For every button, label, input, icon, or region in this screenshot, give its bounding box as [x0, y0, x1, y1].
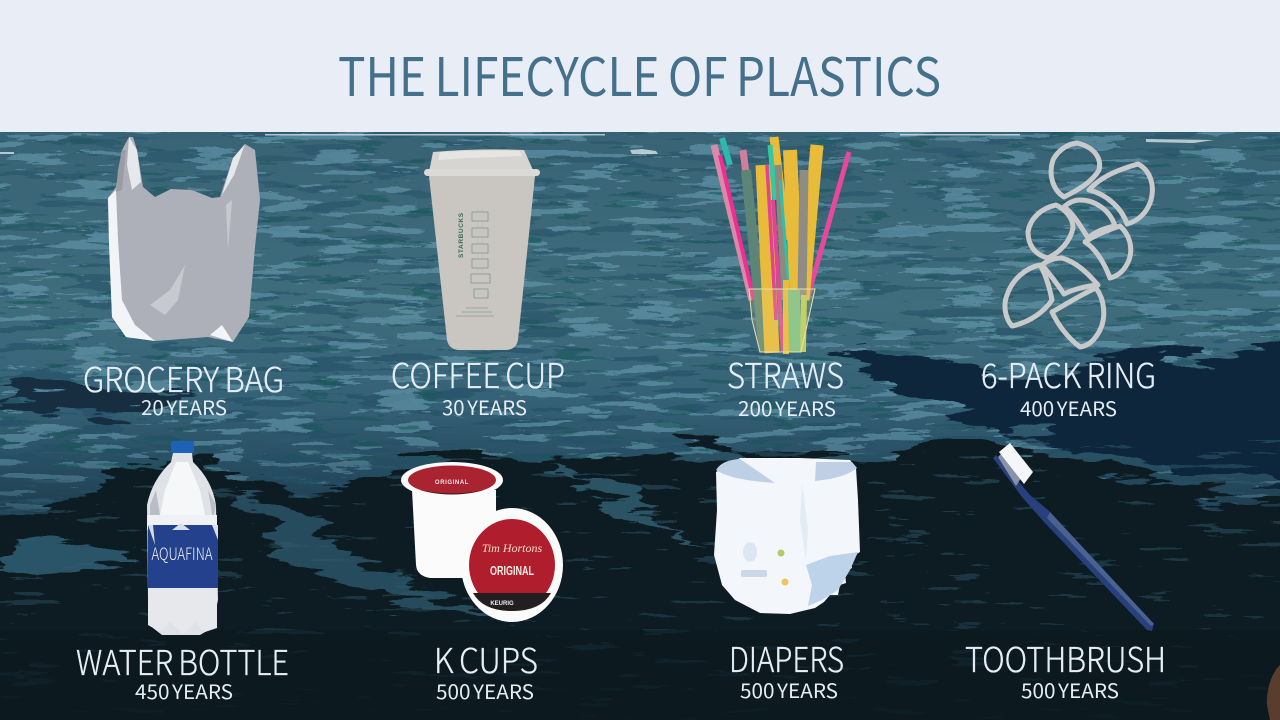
icon: k cup pods — [401, 462, 563, 622]
label: water bottle: WATER BOTTLE — [76, 636, 289, 685]
item: 6-pack ring — [981, 143, 1156, 422]
label: diapers: DIAPERS — [729, 633, 844, 682]
item: coffee cup — [391, 149, 565, 421]
label: 500 years: 500 YEARS — [740, 675, 838, 704]
title: THE LIFECYCLE OF PLASTICS — [338, 36, 941, 112]
label: 6-pack ring: 6-PACK RING — [981, 349, 1156, 398]
label: 30 years: 30 YEARS — [442, 392, 527, 421]
label: 500 years: 500 YEARS — [1021, 675, 1119, 704]
item: straws — [714, 137, 849, 422]
item: k cups — [401, 462, 563, 705]
icon: straws in glass — [714, 137, 849, 354]
icon: reusable cup: STARBUCKS — [458, 212, 465, 258]
icon: diaper — [714, 458, 860, 614]
item: diapers — [714, 458, 860, 704]
label: k cups: K CUPS — [434, 634, 538, 683]
icon: six-pack rings — [1005, 143, 1152, 347]
icon: toothbrush — [993, 443, 1154, 631]
label: coffee cup: COFFEE CUP — [391, 349, 565, 398]
item: toothbrush — [965, 443, 1166, 704]
label: 450 years: 450 YEARS — [135, 676, 233, 705]
label: straws: STRAWS — [727, 349, 844, 398]
icon: k cup pods: ORIGINAL — [435, 480, 469, 486]
corner rock — [1267, 665, 1280, 720]
icon: plastic bag — [108, 137, 260, 342]
icon: reusable cup — [424, 149, 540, 350]
label: 500 years: 500 YEARS — [436, 676, 534, 705]
header band — [0, 0, 1280, 132]
label: grocery bag: GROCERY BAG — [83, 353, 284, 402]
icon: k cup pods: ORIGINAL — [490, 563, 534, 578]
item: grocery bag — [83, 137, 284, 421]
icon: aquafina bottle: AQUAFINA — [152, 540, 212, 565]
label: 400 years: 400 YEARS — [1020, 393, 1117, 422]
icon: aquafina bottle — [147, 441, 218, 635]
icon: k cup pods: KEURIG — [490, 601, 514, 607]
label: 200 years: 200 YEARS — [738, 393, 836, 422]
item: water bottle — [76, 441, 289, 705]
icon: k cup pods: Tim Hortons — [482, 541, 543, 555]
label: 20 years: 20 YEARS — [141, 392, 227, 421]
label: toothbrush: TOOTHBRUSH — [965, 633, 1166, 682]
